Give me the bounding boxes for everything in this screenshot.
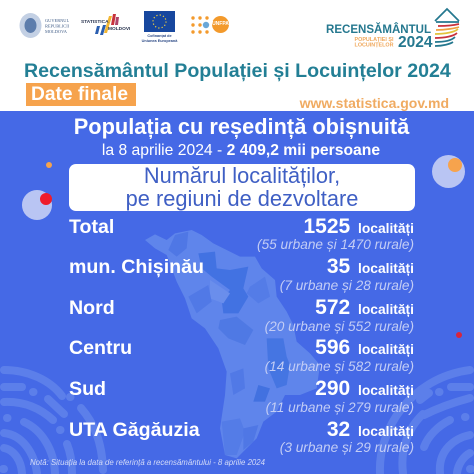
logo: Guvernul Republicii Moldova: MOLDOVA xyxy=(45,29,68,34)
row value: Total: 1525 localități xyxy=(303,215,414,238)
heading: population: Populația cu reședință obișnuită xyxy=(74,114,409,139)
row label: UTA Găgăuzia: UTA Găgăuzia xyxy=(69,419,200,441)
logo: UN dots xyxy=(191,16,210,34)
logo: Statistica Moldovei: STATISTICA xyxy=(81,19,109,25)
logo: Guvernul Republicii Moldova: GUVERNUL xyxy=(45,18,69,23)
text: logo wordmark: RECENSĂMÂNTUL xyxy=(326,23,431,36)
row label: Total: Total xyxy=(69,216,114,238)
footnote: Notă: Situația la data de referință a recensământului - 8 aprilie 2024 xyxy=(30,458,265,467)
row note: mun. Chișinău: (7 urbane și 28 rurale) xyxy=(280,278,414,292)
panel: white subtitle box xyxy=(69,164,415,211)
link: website: www.statistica.gov.md xyxy=(300,94,449,110)
decoration: small orange dot xyxy=(46,162,52,168)
logo: European Union flag xyxy=(144,11,175,32)
panel: white subtitle box: pe regiuni de dezvoltare xyxy=(126,186,358,210)
row note: Total: (55 urbane și 1470 rurale) xyxy=(257,237,414,252)
decoration: concentric arcs bottom left xyxy=(0,366,107,474)
row value: Sud: 290 localități xyxy=(315,377,414,400)
row value: Centru: 596 localități xyxy=(315,336,414,359)
row value: UTA Găgăuzia: 32 localități xyxy=(327,418,414,441)
logo: Statistica Moldovei xyxy=(81,14,130,35)
panel: white subtitle box: Numărul localităților, xyxy=(144,162,340,188)
text: logo subtitle: LOCUINȚELOR xyxy=(355,42,394,48)
icon: house with stripes xyxy=(435,9,459,46)
decoration: small red dot xyxy=(456,332,462,338)
row label: mun. Chișinău: mun. Chișinău xyxy=(69,256,204,278)
decoration: red dot xyxy=(40,193,52,205)
logo: Guvernul Republicii Moldova xyxy=(20,13,70,38)
row value: mun. Chișinău: 35 localități xyxy=(327,255,414,278)
decoration: concentric arcs bottom right xyxy=(376,366,474,474)
decoration: pale circle with orange dot xyxy=(432,155,465,188)
row note: Nord: (20 urbane și 552 rurale) xyxy=(265,318,414,334)
text: logo subtitle: POPULAȚIEI ȘI xyxy=(355,37,394,43)
row label: Nord: Nord xyxy=(69,297,115,319)
row label: Sud: Sud xyxy=(69,378,106,400)
row label: Centru: Centru xyxy=(69,337,132,359)
logo: Recensământul 2024 xyxy=(326,8,460,51)
row note: UTA Găgăuzia: (3 urbane și 29 rurale) xyxy=(280,440,414,455)
caption: EU co-funding: Uniunea Europeană xyxy=(142,39,177,43)
logo: Guvernul Republicii Moldova: REPUBLICII xyxy=(45,24,70,28)
caption: EU co-funding xyxy=(142,34,178,43)
decoration: orange dot xyxy=(448,158,462,172)
row note: Centru: (14 urbane și 582 rurale) xyxy=(265,359,414,374)
row value: Nord: 572 localități xyxy=(315,296,414,319)
badge: Date finale: Date finale xyxy=(31,84,128,105)
caption: EU co-funding: Cofinanțat de xyxy=(147,34,172,38)
text: logo year: 2024 xyxy=(398,34,433,51)
decoration: pale circle with red dot xyxy=(22,190,52,220)
map: Moldova regions xyxy=(145,230,320,458)
title: Recensământul Populației și Locuințelor 2024 xyxy=(24,60,451,82)
subheading: date and total: la 8 aprilie 2024 - 2 409,2 mii persoane xyxy=(102,142,380,159)
row note: Sud: (11 urbane și 279 rurale) xyxy=(266,400,414,414)
logo: UNFPA xyxy=(212,16,229,33)
panel: blue background xyxy=(0,111,474,474)
logo: UNFPA: UNFPA xyxy=(212,21,229,27)
